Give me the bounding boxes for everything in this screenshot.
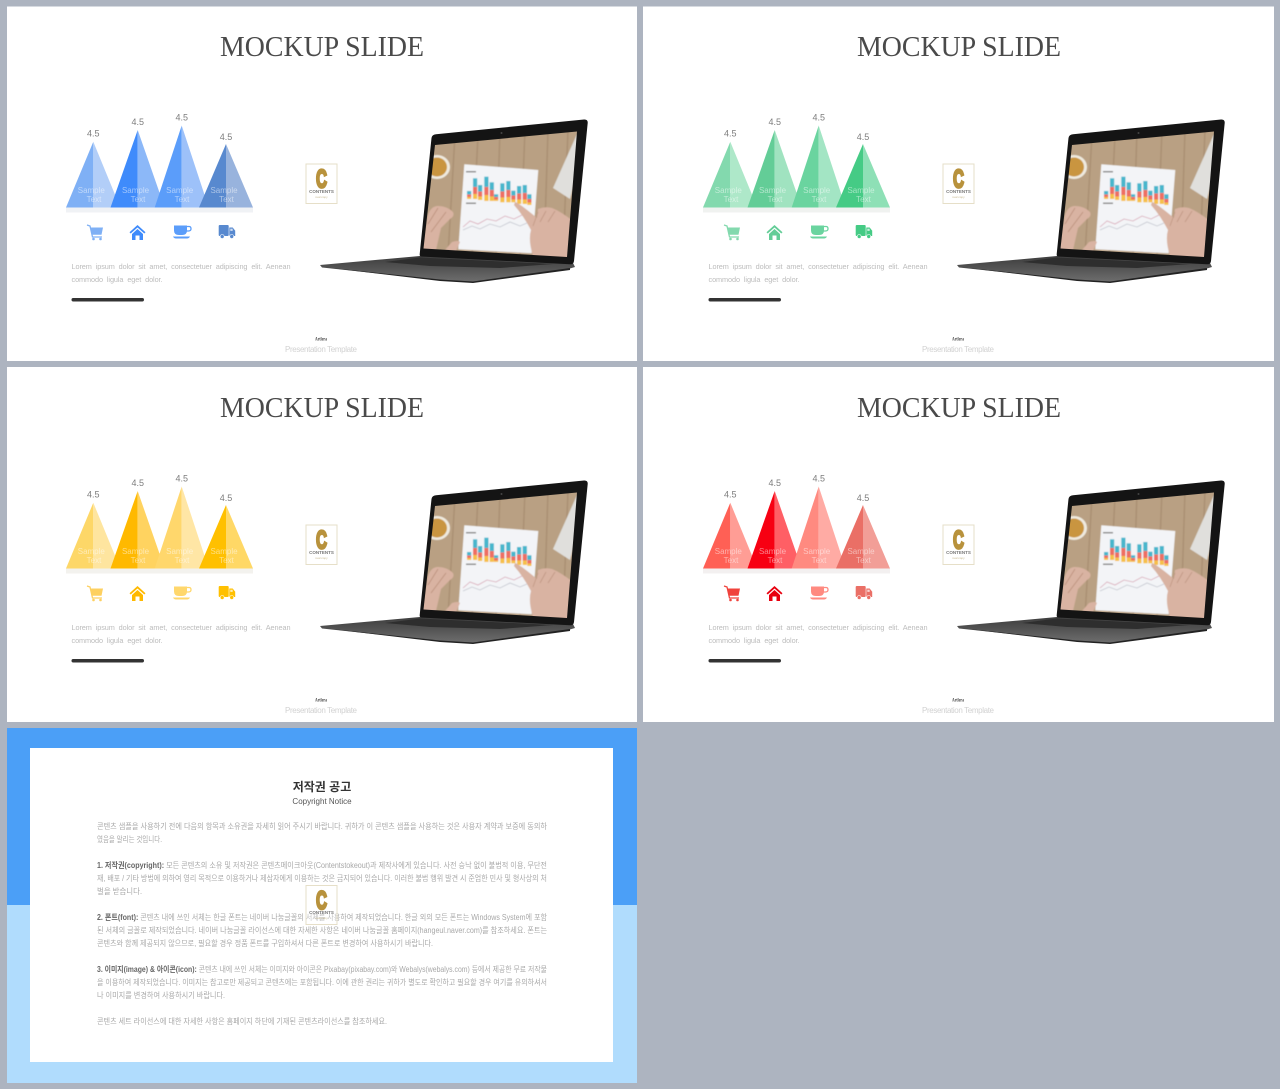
footer: Presentation Template [922, 345, 995, 354]
triangle chart: Text [87, 556, 102, 565]
slide background [643, 367, 1274, 722]
icon: cart [724, 225, 740, 240]
light blue lower background [7, 905, 637, 1083]
paragraph: image and icon: 나 이미지를 변경하여 사용하시기 바랍니다. [97, 990, 225, 1000]
triangle chart: Sample [210, 547, 238, 556]
triangle chart: Sample [715, 186, 742, 195]
accent bar [72, 298, 144, 302]
slide: blue mockup [7, 6, 637, 361]
triangle chart: Sample [166, 547, 194, 556]
accent bar [708, 659, 781, 662]
logo overlay: C [316, 887, 327, 915]
body text [708, 262, 928, 284]
triangle chart: 4.5 [724, 128, 737, 138]
icon: cup [173, 586, 191, 600]
logo: CONTENTS [309, 550, 334, 555]
triangle chart: Sample [803, 186, 831, 195]
icon: cart [87, 225, 103, 240]
triangle chart: 4.5 [131, 117, 144, 127]
closing line: 콘텐츠 세트 라이선스에 대한 자세한 사항은 홈페이지 하단에 기재된 콘텐츠라이선스를 참조하세요. [97, 1016, 387, 1026]
triangle chart: Text [87, 195, 102, 204]
paragraph: image and icon: 3. 이미지(image) & 아이콘(icon): 콘텐츠 내에 쓰인 서체는 이미지와 아이콘은 Pixabay(pixabay.com)와 Webalys(webalys.com) 등에서 제공한 무료 저작물 [97, 964, 547, 974]
paragraph: copyright: 재, 배포 / 기타 방법에 의하여 영리 목적으로 이용하거나 제삼자에게 이용하는 것은 금지되어 있습니다. 이러한 불법 행위 발견 시 준엄한 민사 및 형사상의 처 [97, 873, 547, 883]
icon: house [766, 586, 782, 601]
icon: house [130, 225, 146, 240]
triangle chart: Sample [78, 547, 105, 556]
slide: red mockup [643, 367, 1274, 722]
triangle chart: 4.5 [87, 490, 100, 500]
body text: commodo ligula eget dolor. [72, 275, 162, 284]
footer: Artlera [315, 336, 327, 342]
accent bar [708, 298, 781, 302]
triangle chart: Text [175, 195, 190, 204]
accent bar [72, 659, 144, 662]
logo [943, 525, 974, 564]
triangle chart: 4.5 [768, 478, 781, 488]
paragraph: copyright: 1. 저작권(copyright): 모든 콘텐츠의 소유 및 저작권은 콘텐츠메이크아웃(Contentstokeout)과 제작사에게 있습니다. 사전 승낙 없이 불법적 이용, 무단전 [97, 860, 547, 870]
triangle chart: Sample [847, 547, 875, 556]
triangle chart: 4.5 [220, 493, 232, 503]
triangle chart: 4.5 [87, 128, 100, 138]
body text [72, 262, 290, 284]
logo overlay: real copy [315, 916, 328, 920]
paragraph: copyright [97, 860, 547, 896]
logo overlay [306, 886, 337, 924]
triangle chart: Text [175, 556, 190, 565]
paragraph: image and icon: 을 이용하여 제작되었습니다. 이미지는 참고로만 제공되고 콘텐츠에는 포함됩니다. 이에 관한 권리는 귀하가 별도로 확인하고 필요할 경우 여기를 유의하셔서 [97, 977, 547, 987]
triangle chart: Text [724, 556, 739, 565]
footer: Artlera [952, 698, 964, 704]
slide: green mockup [643, 6, 1274, 361]
triangle chart: 4.5 [175, 474, 188, 484]
icon: house [766, 225, 782, 240]
logo: real copy [952, 195, 965, 199]
icon: cup [173, 226, 191, 238]
laptop mockup [957, 119, 1227, 283]
triangle chart: Text [856, 195, 872, 204]
body text: Lorem ipsum dolor sit amet, consectetuer adipiscing elit. Aenean [72, 623, 290, 632]
laptop mockup [957, 480, 1227, 644]
icon: cup [810, 226, 828, 238]
icon: truck [219, 586, 235, 600]
intro paragraph [97, 821, 548, 844]
slide background [7, 367, 637, 722]
triangle chart: Text [856, 556, 872, 565]
body text: commodo ligula eget dolor. [72, 636, 162, 645]
icon: cart [87, 586, 103, 601]
triangle chart: Sample [759, 186, 787, 195]
logo: C [316, 527, 327, 555]
paragraph: font [97, 912, 548, 948]
icon: truck [856, 225, 872, 238]
triangle chart: Sample [122, 186, 150, 195]
title: MOCKUP SLIDE [857, 31, 1061, 63]
logo overlay: CONTENTS [309, 910, 334, 915]
body text: Lorem ipsum dolor sit amet, consectetuer adipiscing elit. Aenean [708, 623, 928, 632]
triangle chart: 4.5 [131, 478, 144, 488]
triangle chart [703, 112, 890, 212]
title: MOCKUP SLIDE [857, 392, 1061, 424]
logo [306, 525, 337, 564]
triangle chart: Text [812, 556, 827, 565]
triangle chart: 4.5 [812, 112, 825, 122]
triangle chart: Text [768, 195, 783, 204]
logo: CONTENTS [946, 550, 971, 555]
white notice panel [30, 748, 613, 1062]
footer: Presentation Template [922, 706, 995, 715]
footer [922, 336, 995, 354]
triangle chart: 4.5 [857, 132, 869, 142]
logo [306, 164, 337, 204]
paragraph: font: 2. 폰트(font): 콘텐츠 내에 쓰인 서체는 한글 폰트는 네이버 나눔글꼴의 서체를 사용하여 제작되었습니다. 한글 외의 모든 폰트는 Windows System에 포함 [97, 912, 548, 922]
body text [708, 623, 928, 645]
footer: Presentation Template [285, 706, 358, 715]
paragraph: copyright: 벌을 받습니다. [97, 886, 142, 896]
icon: house [130, 586, 146, 601]
triangle chart: Text [131, 195, 146, 204]
triangle chart: Text [768, 556, 783, 565]
triangle chart: Text [724, 195, 739, 204]
body text: Lorem ipsum dolor sit amet, consectetuer adipiscing elit. Aenean [72, 262, 290, 271]
body text: commodo ligula eget dolor. [708, 275, 800, 284]
footer: Artlera [315, 698, 327, 704]
laptop mockup [320, 480, 590, 644]
triangle chart [66, 112, 253, 212]
triangle chart: 4.5 [768, 117, 781, 127]
triangle chart: 4.5 [220, 132, 232, 142]
paragraph: font: 콘텐츠와 함께 제공되지 않으므로, 필요할 경우 정품 폰트를 구입하셔서 다른 폰트로 변경하여 사용하시기 바랍니다. [97, 938, 433, 948]
triangle chart: Sample [715, 547, 742, 556]
triangle chart: Sample [78, 186, 105, 195]
footer [285, 698, 358, 715]
triangle chart: Text [219, 556, 235, 565]
notice subheading: Copyright Notice [292, 797, 352, 806]
triangle chart: Text [812, 195, 827, 204]
logo: real copy [952, 556, 965, 560]
triangle chart: Sample [122, 547, 150, 556]
triangle chart: 4.5 [857, 493, 869, 503]
icon: truck [219, 225, 235, 238]
notice heading: 저작권 공고 [293, 779, 351, 794]
triangle chart: Sample [759, 547, 787, 556]
logo: real copy [315, 556, 328, 560]
paragraph: image and icon [97, 964, 547, 1000]
triangle chart: Sample [803, 547, 831, 556]
title: MOCKUP SLIDE [220, 392, 424, 424]
body text [72, 623, 290, 645]
footer: Artlera [952, 336, 964, 342]
logo: CONTENTS [309, 189, 334, 194]
footer: Presentation Template [285, 345, 358, 354]
slide background [7, 6, 637, 361]
intro paragraph: 콘텐츠 샘플을 사용하기 전에 다음의 항목과 소유권을 자세히 읽어 주시기 바랍니다. 귀하가 이 콘텐츠 샘플을 사용하는 것은 사용자 계약과 보증에 동의하 [97, 821, 548, 831]
body text: commodo ligula eget dolor. [708, 636, 800, 645]
triangle chart [703, 474, 890, 574]
intro paragraph: 였음을 알리는 것입니다. [97, 834, 162, 844]
title: MOCKUP SLIDE [220, 31, 424, 63]
triangle chart: Sample [210, 186, 238, 195]
triangle chart: Text [219, 195, 235, 204]
slide: yellow mockup [7, 367, 637, 722]
laptop mockup [320, 119, 590, 283]
footer [285, 336, 358, 354]
footer [922, 698, 995, 715]
triangle chart [66, 474, 253, 574]
triangle chart: 4.5 [724, 490, 737, 500]
body text: Lorem ipsum dolor sit amet, consectetuer adipiscing elit. Aenean [708, 262, 928, 271]
icon: cup [810, 586, 828, 600]
triangle chart: Sample [847, 186, 875, 195]
icon: cart [724, 586, 740, 601]
logo: C [953, 166, 964, 194]
logo: CONTENTS [946, 189, 971, 194]
triangle chart: Sample [166, 186, 194, 195]
logo [943, 164, 974, 204]
triangle chart: 4.5 [812, 474, 825, 484]
logo: real copy [315, 195, 328, 199]
logo: C [953, 527, 964, 555]
triangle chart: Text [131, 556, 146, 565]
triangle chart: 4.5 [175, 112, 188, 122]
blue upper background [7, 728, 637, 905]
icon: truck [856, 586, 872, 600]
paragraph: font: 된 서체의 글꼴로 제작되었습니다. 네이버 나눔글꼴 라이선스에 대한 자세한 사항은 네이버 나눔글꼴 홈페이지(hangeul.naver.com)를 참조하세요. 폰트는 [97, 925, 547, 935]
slide: copyright notice [7, 728, 637, 1083]
logo: C [316, 166, 327, 194]
slide background [643, 6, 1274, 361]
